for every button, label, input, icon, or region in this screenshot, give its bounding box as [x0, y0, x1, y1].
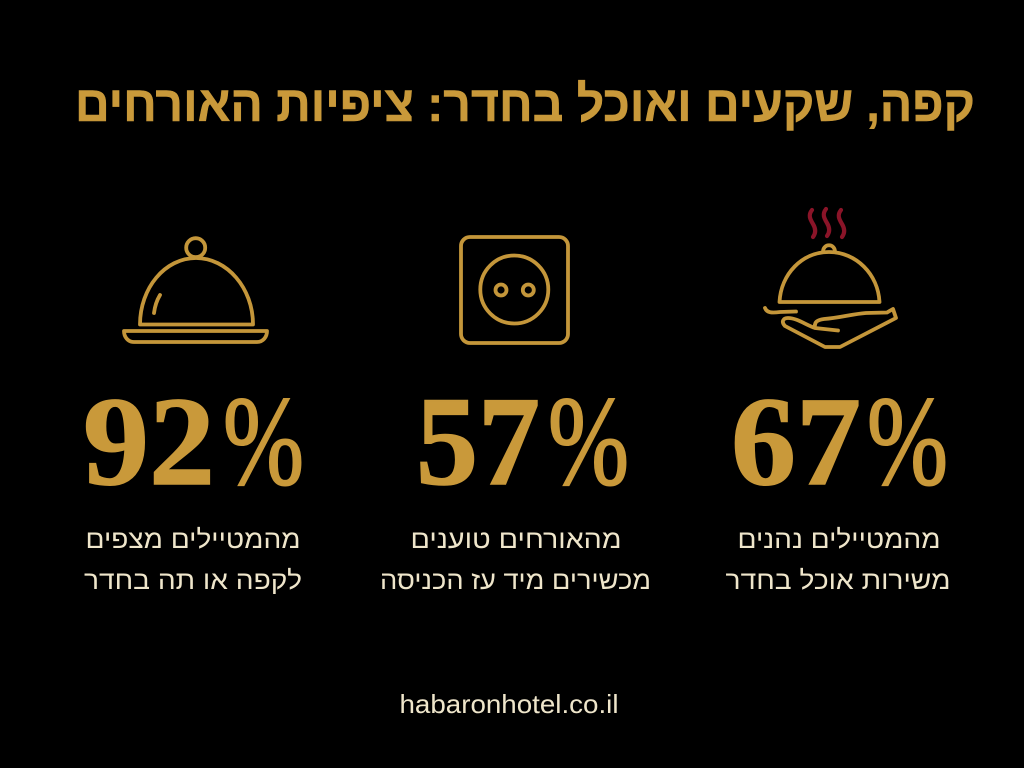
- stat: 67%: 67: [731, 372, 861, 512]
- caption: 67%: [726, 524, 950, 595]
- stat: 57%: %: [548, 372, 629, 512]
- stat: 67%: %: [867, 372, 948, 512]
- stat: 67%: [731, 372, 948, 512]
- caption: 67%: משירות אוכל בחדר: [726, 565, 950, 595]
- stat: 57%: 57: [416, 372, 540, 512]
- stat: 92%: [83, 372, 304, 512]
- icon: hand holding steaming dish: [765, 209, 896, 347]
- caption: 57%: מכשירים מיד עז הכניסה: [380, 565, 651, 595]
- footer website: habaronhotel.co.il: [400, 689, 618, 719]
- caption: 57%: [380, 524, 651, 595]
- stat: 92%: 92: [83, 372, 215, 512]
- icon: covered dish on tray: [124, 238, 267, 342]
- stat: 92%: %: [223, 372, 304, 512]
- stat: 57%: [416, 372, 629, 512]
- panel: charging devices: [380, 237, 651, 595]
- icon: power socket: [461, 237, 568, 343]
- caption: 92%: מהמטיילים מצפים: [86, 524, 300, 554]
- caption: 92%: לקפה או תה בחדר: [84, 565, 302, 595]
- panel: room coffee or tea: [83, 238, 304, 595]
- caption: 67%: מהמטיילים נהנים: [738, 524, 940, 554]
- icon: steam: [810, 209, 844, 237]
- title: קפה, שקעים ואוכל בחדר: ציפיות האורחים: [75, 76, 975, 132]
- panel: room food service: [726, 209, 950, 595]
- caption: 92%: [84, 524, 302, 595]
- icon: cloche and hand: [765, 245, 896, 347]
- caption: 57%: מהאורחים טוענים: [410, 524, 622, 554]
